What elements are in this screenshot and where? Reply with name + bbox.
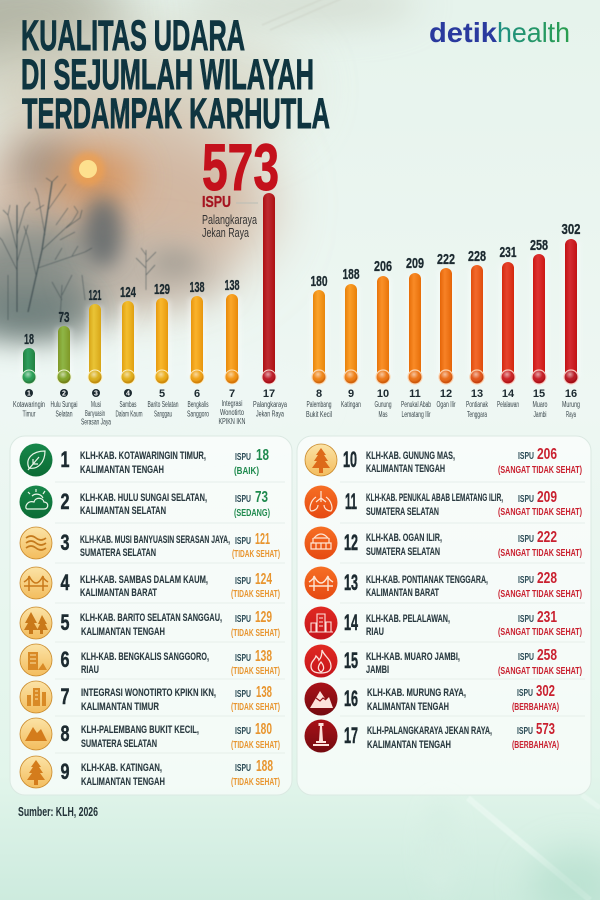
row 14: 231 (537, 609, 557, 626)
chart axis labels: 13 (471, 388, 483, 400)
row 13: 228 (537, 570, 557, 587)
row 4: 124 (255, 571, 272, 588)
row 14: 14 (344, 610, 358, 635)
chart axis labels: 10 (377, 388, 389, 400)
chart axis labels: Integrasi (222, 399, 243, 408)
row 15: KLH-KAB. MUARO JAMBI, (366, 651, 460, 663)
bar chart: ISPU per location (22, 193, 580, 384)
chart axis labels: 14 (502, 388, 515, 400)
row 12: SUMATERA SELATAN (366, 546, 440, 558)
bar 4 (120, 284, 136, 384)
chart axis labels: Raya (566, 410, 576, 419)
row 8: (TIDAK SEHAT) (231, 740, 280, 751)
bar 3: 121 (88, 287, 102, 304)
row 9: 188 (256, 758, 273, 775)
bar 10 (374, 258, 392, 384)
chart axis labels: 4 (126, 390, 130, 398)
row 2: KALIMANTAN SELATAN (80, 505, 166, 517)
sun (71, 152, 105, 186)
chart axis labels: Barito Selatan (148, 400, 178, 409)
chart axis labels: Selatan (56, 410, 72, 418)
row 5: 129 (255, 609, 272, 626)
chart axis labels (13, 388, 580, 426)
row 2: KLH-KAB. HULU SUNGAI SELATAN, (80, 492, 207, 504)
row 12: KLH-KAB. OGAN ILIR, (366, 532, 442, 544)
row 3: 121 (255, 531, 270, 548)
row 8: KLH-PALEMBANG BUKIT KECIL, (81, 724, 199, 736)
row 10: 206 (537, 446, 557, 463)
row 4: ISPU (235, 575, 251, 587)
row 9: KALIMANTAN TENGAH (81, 776, 165, 788)
row 1: (BAIK) (234, 466, 259, 477)
bar 7: 138 (224, 277, 240, 294)
row 9: KLH-KAB. KATINGAN, (81, 762, 162, 774)
row 4: (TIDAK SEHAT) (231, 589, 280, 600)
row 5: KALIMANTAN TENGAH (81, 626, 165, 638)
row 3: 3 (60, 530, 70, 555)
row 10: 10 (343, 447, 357, 472)
row 2: ISPU (235, 493, 251, 505)
row 17: KALIMANTAN TENGAH (367, 739, 451, 751)
bar 8 (310, 273, 328, 384)
chart axis labels: Wonotirto (220, 408, 244, 417)
row 7 (20, 681, 280, 713)
chart axis labels: Palembang (306, 400, 332, 409)
row 7: 7 (60, 684, 70, 709)
callout: highest value 573: 573 (202, 130, 279, 204)
row 14: RIAU (366, 626, 384, 638)
row 7: 138 (256, 684, 272, 701)
bar 13 (468, 248, 486, 384)
row 6: 138 (255, 648, 272, 665)
row 3: (TIDAK SEHAT) (232, 549, 280, 560)
bar 10: 206 (374, 258, 392, 275)
row 16: KALIMANTAN TENGAH (367, 701, 449, 713)
row 5: ISPU (235, 613, 251, 625)
chart axis labels: 6 (194, 388, 200, 400)
chart axis labels: 11 (409, 388, 421, 400)
row 15: JAMBI (366, 664, 389, 676)
row 7: KALIMANTAN TIMUR (81, 701, 159, 713)
row 7: (TIDAK SEHAT) (231, 702, 280, 713)
chart axis labels: Murung (562, 400, 580, 409)
row 14: KLH-KAB. PELALAWAN, (366, 613, 450, 625)
bar 15 (530, 237, 548, 384)
row 9 (20, 756, 280, 788)
row 13: ISPU (518, 574, 534, 586)
row 12: 222 (537, 529, 557, 546)
row 7: ISPU (235, 688, 251, 700)
chart axis labels: Musi (91, 400, 101, 409)
row 5: (TIDAK SEHAT) (231, 628, 280, 639)
row 14: ISPU (518, 613, 534, 625)
bare trees silhouette (0, 176, 156, 320)
row 3: ISPU (235, 535, 251, 547)
bar 6 (190, 279, 204, 384)
chart axis labels: Sambas (120, 400, 136, 409)
row 1: 18 (256, 447, 269, 464)
chart axis labels: 12 (440, 388, 452, 400)
bar 1 (22, 331, 36, 384)
row 1: ISPU (235, 451, 251, 463)
row 13: KALIMANTAN BARAT (366, 587, 439, 599)
chart axis labels: Dalam Kaum (116, 410, 143, 418)
chart axis labels: Banyuasin (85, 409, 105, 418)
bar 3 (88, 287, 102, 384)
bar 9: 188 (342, 266, 360, 283)
chart axis labels: Tenggara (467, 410, 487, 419)
row 1 (20, 444, 269, 477)
bar 6: 138 (190, 279, 204, 296)
row 17 (304, 720, 559, 752)
row 11: KLH-KAB. PENUKAL ABAB LEMATANG ILIR, (366, 492, 503, 504)
bar 12 (437, 251, 455, 384)
row 7: INTEGRASI WONOTIRTO KPIKN IKN, (81, 687, 216, 699)
row 4: KLH-KAB. SAMBAS DALAM KAUM, (80, 574, 208, 586)
chart axis labels: 1 (27, 390, 31, 398)
chart axis labels: 7 (229, 388, 235, 400)
source note: Sumber: KLH, 2026 (18, 805, 98, 819)
chart axis labels: Kotawaringin (13, 400, 45, 409)
chart axis labels: Jambi (534, 410, 547, 419)
row 13: KLH-KAB. PONTIANAK TENGGARA, (366, 574, 488, 586)
chart axis labels: Sanggoro (187, 410, 209, 418)
row 15 (304, 644, 582, 678)
logo: detikhealth (429, 17, 570, 48)
chart axis labels: 15 (533, 388, 545, 400)
chart axis labels: Pontianak (466, 400, 489, 409)
chart axis labels: KPIKN IKN (218, 417, 246, 426)
chart axis labels: Hulu Sungai (50, 400, 78, 409)
chart axis labels: 8 (316, 388, 322, 400)
chart axis labels: Jekan Raya (256, 410, 284, 418)
row 6: ISPU (235, 652, 251, 664)
callout: highest value 573 (202, 130, 279, 240)
row 14 (304, 606, 582, 640)
title: DI SEJUMLAH WILAYAH (21, 51, 314, 99)
bar 17 (262, 193, 276, 384)
chart axis labels: Ogan Ilir (436, 400, 456, 409)
bar 14: 231 (500, 244, 516, 261)
callout: highest value 573: Palangkaraya (202, 212, 258, 227)
row 10 (305, 444, 582, 476)
row 13 (304, 566, 582, 600)
row 8: ISPU (235, 725, 251, 737)
row 4: 4 (60, 570, 70, 595)
chart axis labels: Sanggau (154, 410, 172, 418)
bar 9 (342, 266, 360, 384)
bar 16 (562, 221, 580, 384)
title (21, 12, 330, 138)
row 15: ISPU (518, 651, 534, 663)
chart axis labels: 17 (263, 388, 275, 400)
chart axis labels: Timur (22, 410, 36, 418)
chart axis labels: 3 (94, 390, 98, 398)
row 17: (BERBAHAYA) (512, 740, 559, 751)
row 16: 302 (536, 683, 555, 700)
chart axis labels: Lematang Ilir (402, 410, 431, 419)
row 8: SUMATERA SELATAN (81, 738, 157, 750)
bar 7 (224, 277, 240, 384)
row 1: 1 (60, 447, 70, 472)
row 6: (TIDAK SEHAT) (231, 666, 280, 677)
chart axis labels: 5 (159, 388, 165, 400)
row 2: 2 (60, 489, 70, 514)
row 2: 73 (255, 489, 268, 506)
bar 5: 129 (154, 281, 170, 298)
ball highlights (22, 370, 578, 384)
row 5: KLH-KAB. BARITO SELATAN SANGGAU, (80, 612, 222, 624)
logo: detikhealth: health (497, 17, 570, 48)
row 13: 13 (344, 570, 358, 595)
chart axis labels: Gunung (374, 400, 392, 409)
row 10: KLH-KAB. GUNUNG MAS, (366, 450, 455, 462)
bar 11: 209 (406, 255, 424, 272)
row 5: 5 (60, 610, 70, 635)
row 8: 180 (255, 721, 272, 738)
logo: detikhealth: detik (429, 17, 497, 48)
row 17: 573 (536, 721, 555, 738)
row 2: (SEDANG) (234, 508, 270, 519)
row 17: KLH-PALANGKARAYA JEKAN RAYA, (367, 725, 492, 737)
chart axis labels: Palangkaraya (253, 400, 287, 409)
chart axis labels: Penukal Abab (401, 400, 431, 409)
bar 15: 258 (530, 237, 548, 254)
row 16: 16 (344, 686, 358, 711)
row 5 (20, 607, 280, 639)
bar 4: 124 (120, 284, 136, 301)
row 17: 17 (344, 723, 358, 748)
bar 2: 73 (58, 309, 70, 326)
bar 5 (154, 281, 170, 384)
panel: right list 10-17 (297, 436, 591, 795)
row 9: 9 (60, 759, 70, 784)
bar 1: 18 (24, 331, 34, 348)
row 15: 258 (537, 647, 557, 664)
row 8 (20, 718, 280, 751)
chart axis labels: 9 (348, 388, 354, 400)
chart axis labels: Bukit Kecil (306, 410, 332, 419)
title: KUALITAS UDARA (21, 12, 245, 60)
row 10: ISPU (518, 450, 534, 462)
row 16: (BERBAHAYA) (512, 702, 559, 713)
row 10: KALIMANTAN TENGAH (366, 463, 445, 475)
row 17: ISPU (517, 725, 533, 737)
row 11: 11 (345, 489, 357, 514)
chart axis labels: Serasan Jaya (81, 418, 111, 426)
row 3: SUMATERA SELATAN (80, 547, 156, 559)
bar 8: 180 (310, 273, 328, 290)
row 6: KLH-KAB. BENGKALIS SANGGORO, (81, 651, 209, 663)
row 15: 15 (344, 648, 358, 673)
row 6 (20, 644, 280, 677)
row 1: KALIMANTAN TENGAH (80, 464, 164, 476)
row 3: KLH-KAB. MUSI BANYUASIN SERASAN JAYA, (80, 534, 230, 546)
row 9: (TIDAK SEHAT) (231, 777, 280, 788)
chart axis labels: Mas (378, 410, 388, 419)
callout: highest value 573: Jekan Raya (202, 225, 250, 240)
callout: highest value 573: ISPU (202, 194, 231, 211)
row 11: ISPU (518, 493, 534, 505)
chart axis labels: Bengkalis (188, 400, 208, 409)
row 3 (20, 527, 280, 560)
row 16 (304, 682, 559, 716)
bar 2 (57, 309, 71, 384)
bar 14 (500, 244, 516, 384)
row 2 (20, 486, 270, 519)
row 12: ISPU (518, 533, 534, 545)
row 6: 6 (60, 647, 70, 672)
row 4 (20, 567, 280, 600)
row 1: KLH-KAB. KOTAWARINGIN TIMUR, (80, 450, 206, 462)
row 11 (304, 486, 582, 518)
chart axis labels: 16 (565, 388, 577, 400)
row 11: 209 (537, 489, 557, 506)
title: TERDAMPAK KARHUTLA (22, 90, 330, 138)
row 4: KALIMANTAN BARAT (80, 587, 157, 599)
chart axis labels: Pelalawan (497, 400, 519, 409)
chart axis labels: Katingan (341, 400, 361, 409)
row 9: ISPU (235, 762, 251, 774)
row 16: ISPU (517, 687, 533, 699)
bar 13: 228 (468, 248, 486, 265)
bar 11 (406, 255, 424, 384)
row 8: 8 (60, 721, 70, 746)
bar 16: 302 (562, 221, 580, 238)
row 12: 12 (344, 530, 358, 555)
row 6: RIAU (81, 664, 99, 676)
panel: left list 1-9 (10, 436, 292, 795)
chart axis labels: Muaro (532, 400, 548, 409)
row 16: KLH-KAB. MURUNG RAYA, (367, 687, 466, 699)
row 11: SUMATERA SELATAN (366, 506, 439, 518)
row 12 (304, 526, 582, 560)
bar 12: 222 (437, 251, 455, 268)
chart axis labels: 2 (62, 390, 66, 398)
